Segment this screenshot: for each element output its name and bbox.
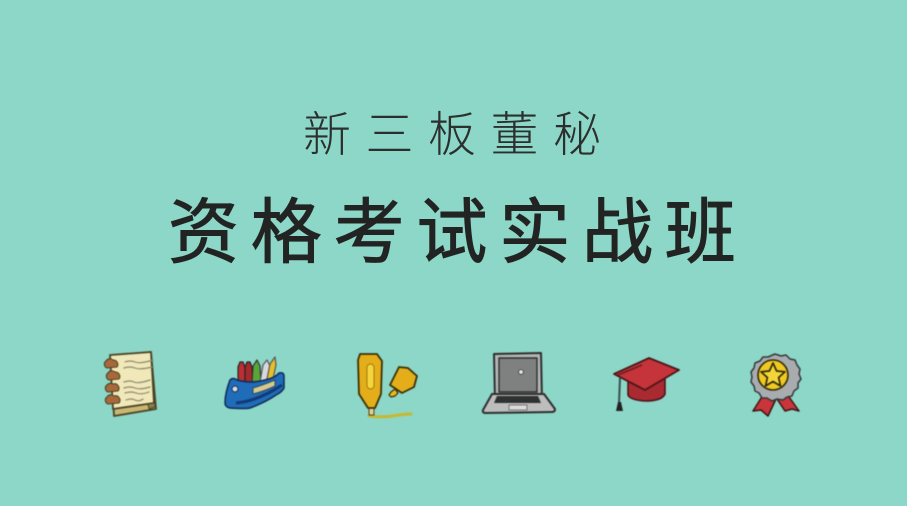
subtitle: 新三板董秘 bbox=[303, 109, 616, 162]
icon: notebook bbox=[104, 352, 156, 416]
icon: highlighter bbox=[358, 354, 417, 417]
icon: award rosette bbox=[751, 354, 801, 416]
icon: graduation cap bbox=[614, 358, 679, 411]
icon: laptop bbox=[483, 353, 555, 413]
main title: 资格考试实战班 bbox=[168, 194, 748, 273]
icon: pencil case bbox=[225, 357, 284, 408]
